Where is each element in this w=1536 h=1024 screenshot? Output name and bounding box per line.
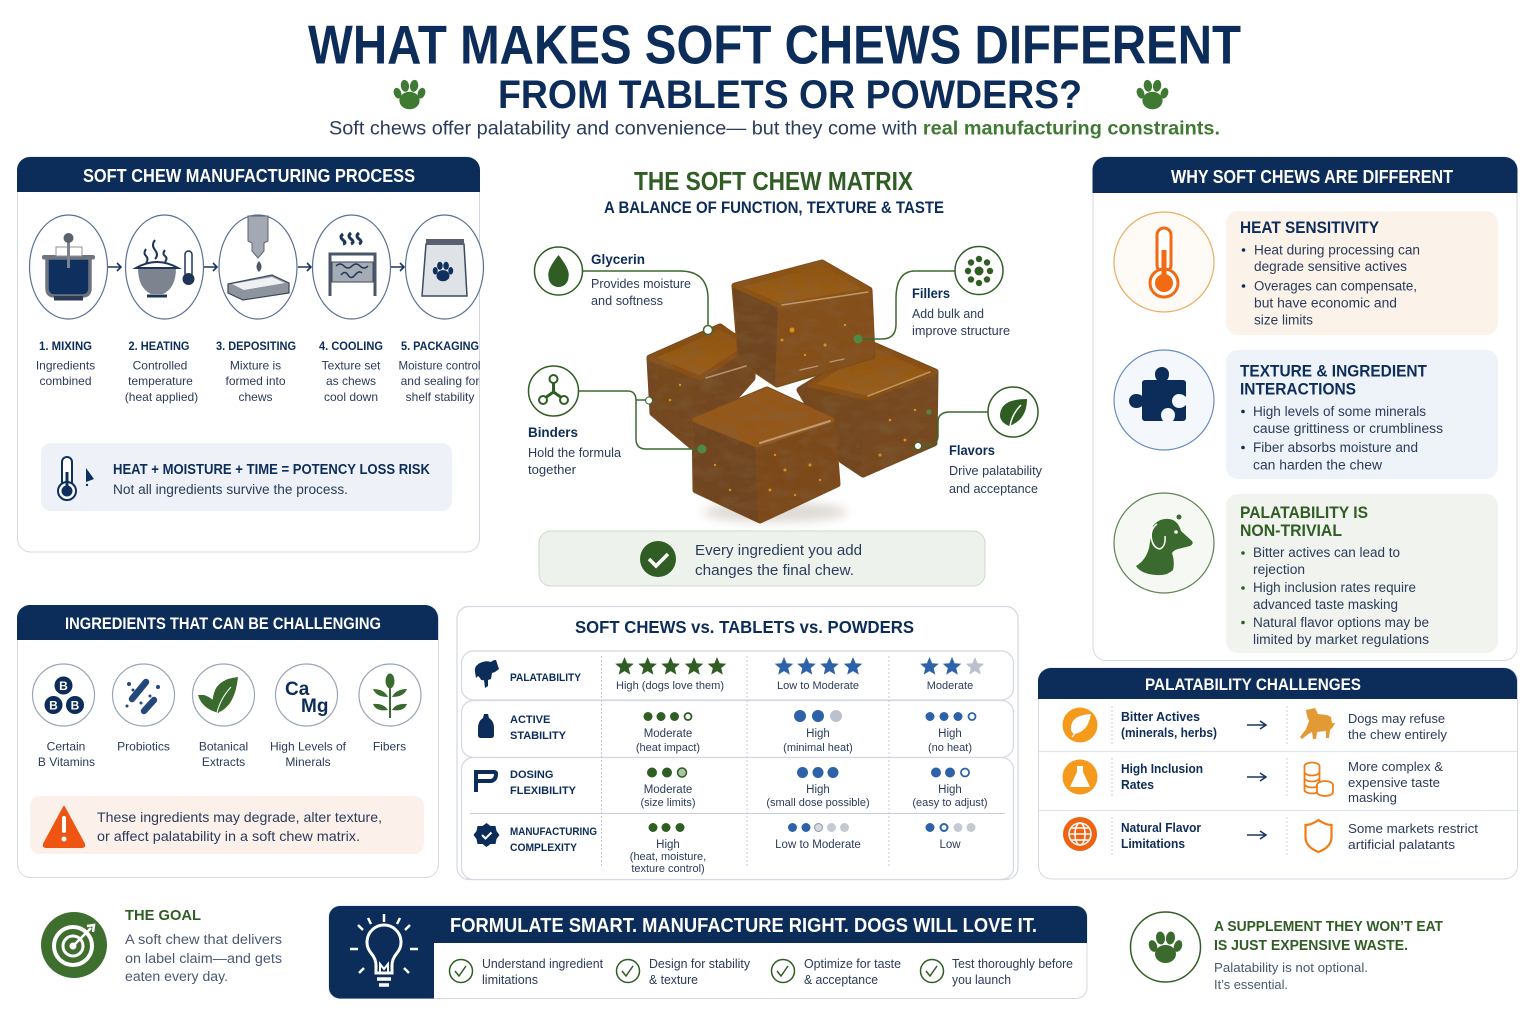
- card: texture and ingredient interactions: Fiber absorbs moisture and: [1253, 440, 1418, 455]
- card: heat sensitivity: HEAT SENSITIVITY: [1240, 219, 1379, 237]
- row: dosing flexibility: (small dose possible): [766, 797, 870, 809]
- row: active stability: (heat impact): [636, 742, 700, 754]
- step: depositing: formed into: [225, 374, 286, 388]
- panel: palatability challenges: [1038, 668, 1518, 879]
- row: high inclusion rates: Rates: [1121, 778, 1154, 792]
- card: heat sensitivity: but have economic and: [1254, 296, 1397, 310]
- heading: process: SOFT CHEW MANUFACTURING PROCESS: [83, 166, 415, 186]
- ingredient: minerals: Ca: [285, 679, 310, 700]
- ingredient: minerals: Mg: [301, 696, 328, 717]
- step: heating: [125, 215, 204, 404]
- icon: paw badge: [1130, 912, 1200, 982]
- cube back right: [800, 345, 935, 474]
- title: [308, 14, 1241, 117]
- item: test: Test thoroughly before: [952, 957, 1073, 971]
- row: palatability: High (dogs love them): [616, 680, 724, 692]
- row: dosing flexibility: Moderate: [644, 784, 692, 796]
- item: optimize: Optimize for taste: [804, 957, 901, 971]
- row: high inclusion rates: [1062, 760, 1444, 805]
- row: dosing flexibility: [476, 767, 988, 809]
- step: mixing: combined: [39, 374, 92, 388]
- callout: potency loss: [41, 443, 452, 511]
- callout: glycerin: [534, 247, 712, 334]
- callout: warning: or affect palatability in a soft chew matrix.: [97, 828, 360, 844]
- the goal: eaten every day.: [125, 969, 228, 984]
- icon: light bulb: [350, 914, 418, 985]
- callout: every ingredient: [539, 531, 985, 586]
- card: palatability is non-trivial: Bitter actives can lead to: [1253, 545, 1400, 560]
- step: packaging: Moisture control: [398, 358, 480, 372]
- ingredient: botanical extracts: [192, 664, 254, 769]
- ingredient: b vitamins: [32, 664, 95, 769]
- card: heat sensitivity: size limits: [1254, 312, 1313, 328]
- row: manufacturing complexity: High: [656, 839, 680, 851]
- cube top: [735, 263, 872, 384]
- row: natural flavor limitations: artificial palatants: [1348, 838, 1455, 852]
- step: depositing: 3. DEPOSITING: [216, 339, 296, 353]
- cube back left: [650, 327, 752, 446]
- closing message: It’s essential.: [1214, 978, 1288, 992]
- subtitle: Soft chews offer palatability and convenience— but they come with real manufacturing constraints.: [329, 118, 1220, 140]
- ingredient: fibers: Fibers: [373, 740, 406, 754]
- card: palatability is non-trivial: advanced taste masking: [1253, 597, 1398, 612]
- step: cooling: 4. COOLING: [319, 339, 383, 353]
- callout: binders: together: [528, 463, 576, 477]
- row: high inclusion rates: expensive taste: [1348, 776, 1440, 790]
- callout: binders: [528, 366, 706, 477]
- row: palatability: Low to Moderate: [777, 680, 859, 692]
- callout: warning: [30, 796, 424, 854]
- row: manufacturing complexity: (heat, moisture,: [630, 851, 706, 863]
- panel: why soft chews are different: [1092, 157, 1518, 660]
- heading: soft chew matrix: [604, 166, 944, 217]
- heading: soft chew matrix: A BALANCE OF FUNCTION, TEXTURE & TASTE: [604, 199, 944, 217]
- step: heating: Controlled: [133, 358, 187, 372]
- row: manufacturing complexity: COMPLEXITY: [510, 842, 578, 854]
- card: texture and ingredient interactions: cause grittiness or crumbliness: [1253, 421, 1443, 436]
- closing message: Palatability is not optional.: [1214, 961, 1368, 975]
- icon: paw left: [392, 79, 427, 109]
- row: natural flavor limitations: Limitations: [1121, 837, 1185, 851]
- step: packaging: 5. PACKAGING: [401, 339, 479, 353]
- arrow: [108, 263, 121, 271]
- row: bitter actives: (minerals, herbs): [1121, 726, 1217, 740]
- icon: target: [41, 912, 107, 978]
- step: cooling: [312, 215, 390, 404]
- icon: thermometer: [1114, 212, 1214, 312]
- card: heat sensitivity: degrade sensitive actives: [1254, 259, 1407, 274]
- row: palatability: [475, 657, 984, 692]
- closing message: IS JUST EXPENSIVE WASTE.: [1214, 938, 1408, 954]
- step: cooling: cool down: [324, 390, 378, 404]
- icon: paw right: [1135, 79, 1170, 109]
- image: soft chew cubes: [650, 263, 935, 522]
- row: active stability: [478, 710, 976, 754]
- row: active stability: ACTIVE: [510, 714, 550, 726]
- step: depositing: chews: [238, 390, 273, 404]
- banner: formulate smart: FORMULATE SMART. MANUFACTURE RIGHT. DOGS WILL LOVE IT.: [450, 915, 1037, 937]
- row: active stability: High: [806, 728, 830, 740]
- card: texture and ingredient interactions: INTERACTIONS: [1240, 380, 1356, 398]
- callout: fillers: Fillers: [912, 285, 950, 301]
- step: packaging: shelf stability: [406, 390, 474, 404]
- callout: fillers: [854, 246, 1010, 344]
- ingredient: probiotics: [112, 664, 174, 754]
- step: mixing: [30, 215, 108, 388]
- step: heating: 2. HEATING: [128, 339, 190, 353]
- heading: soft chew matrix: THE SOFT CHEW MATRIX: [634, 166, 914, 196]
- callout: every ingredient: changes the final chew.: [695, 562, 854, 579]
- step: packaging: [398, 215, 484, 404]
- item: understand: [450, 957, 604, 987]
- icon: dog head: [1114, 493, 1214, 593]
- arrow: [204, 263, 217, 271]
- row: manufacturing complexity: Low to Moderate: [775, 839, 861, 851]
- row: dosing flexibility: High: [806, 784, 830, 796]
- callout: flavors: Flavors: [949, 442, 995, 458]
- the goal: [41, 907, 282, 984]
- row: bitter actives: Bitter Actives: [1121, 710, 1200, 724]
- callout: every ingredient: Every ingredient you add: [695, 542, 862, 559]
- banner: formulate smart: [329, 906, 1087, 998]
- ingredient: minerals: High Levels of: [270, 740, 347, 754]
- card: heat sensitivity: Heat during processing can: [1254, 242, 1420, 258]
- arrow: [298, 263, 311, 271]
- step: cooling: as chews: [326, 374, 376, 388]
- item: test: you launch: [952, 973, 1011, 987]
- callout: fillers: Add bulk and: [912, 307, 984, 321]
- callout: potency loss: Not all ingredients survive the process.: [113, 482, 348, 497]
- callout: binders: Binders: [528, 424, 578, 440]
- row: dosing flexibility: FLEXIBILITY: [510, 785, 577, 797]
- item: design: [616, 957, 751, 987]
- icon: puzzle piece: [1114, 350, 1214, 450]
- step: heating: temperature: [128, 374, 193, 388]
- arrow: [391, 263, 404, 271]
- card: texture and ingredient interactions: can harden the chew: [1253, 458, 1382, 472]
- ingredient: b vitamins: Certain: [47, 740, 85, 754]
- ingredient: botanical extracts: Botanical: [199, 740, 248, 754]
- step: packaging: and sealing for: [401, 374, 479, 388]
- heading: palatability challenges: PALATABILITY CHALLENGES: [1145, 676, 1361, 694]
- callout: fillers: improve structure: [912, 324, 1010, 338]
- row: manufacturing complexity: [474, 823, 976, 875]
- card: texture and ingredient interactions: [1226, 350, 1498, 479]
- the goal: A soft chew that delivers: [125, 932, 282, 947]
- callout: binders: Hold the formula: [528, 446, 621, 460]
- ingredient: b vitamins: B: [49, 698, 58, 712]
- item: optimize: [772, 957, 901, 987]
- card: texture and ingredient interactions: TEXTURE & INGREDIENT: [1240, 362, 1427, 380]
- row: high inclusion rates: masking: [1348, 791, 1397, 805]
- row: dosing flexibility: DOSING: [510, 769, 553, 781]
- ingredient: probiotics: Probiotics: [117, 740, 170, 754]
- ingredient: minerals: [270, 664, 347, 769]
- callout: potency loss: HEAT + MOISTURE + TIME = POTENCY LOSS RISK: [113, 462, 430, 478]
- heading: ingredients: INGREDIENTS THAT CAN BE CHALLENGING: [65, 615, 381, 633]
- card: palatability is non-trivial: PALATABILITY IS: [1240, 504, 1368, 522]
- card: palatability is non-trivial: High inclusion rates require: [1253, 580, 1416, 595]
- panel: ingredients that can be challenging: [17, 605, 438, 878]
- ingredient: b vitamins: B: [71, 698, 80, 712]
- callout: flavors: and acceptance: [949, 482, 1038, 496]
- closing message: A SUPPLEMENT THEY WON’T EAT: [1214, 919, 1443, 935]
- cube highlights: [706, 292, 930, 443]
- row: active stability: STABILITY: [510, 730, 567, 742]
- heading: why: WHY SOFT CHEWS ARE DIFFERENT: [1171, 167, 1453, 187]
- row: bitter actives: the chew entirely: [1348, 728, 1448, 742]
- row: bitter actives: [1062, 708, 1448, 742]
- row: active stability: High: [938, 728, 962, 740]
- callout: glycerin: Glycerin: [591, 251, 645, 267]
- callout: warning: These ingredients may degrade, alter texture,: [97, 809, 382, 825]
- row: palatability: Moderate: [927, 680, 973, 692]
- cube speckles: [669, 324, 916, 496]
- card: texture and ingredient interactions: High levels of some minerals: [1253, 404, 1426, 419]
- ingredient: fibers: [359, 664, 421, 754]
- row: natural flavor limitations: Natural Flavor: [1121, 821, 1201, 835]
- row: high inclusion rates: High Inclusion: [1121, 762, 1203, 776]
- row: natural flavor limitations: [1063, 817, 1479, 852]
- item: design: & texture: [649, 973, 698, 987]
- ingredient: b vitamins: B Vitamins: [38, 755, 95, 769]
- row: natural flavor limitations: Some markets restrict: [1348, 822, 1479, 836]
- the goal: THE GOAL: [125, 907, 201, 924]
- card: heat sensitivity: Overages can compensate,: [1254, 278, 1417, 294]
- step: mixing: Ingredients: [36, 358, 95, 372]
- callout: flavors: [914, 387, 1043, 496]
- card: heat sensitivity: [1226, 211, 1498, 335]
- row: manufacturing complexity: texture control): [631, 863, 705, 875]
- heading: comparison: SOFT CHEWS vs. TABLETS vs. POWDERS: [575, 617, 914, 637]
- ingredient: b vitamins: B: [59, 679, 68, 693]
- item: design: Design for stability: [649, 957, 751, 971]
- row: dosing flexibility: (easy to adjust): [912, 797, 988, 809]
- row: active stability: Moderate: [644, 728, 692, 740]
- card: palatability is non-trivial: Natural flavor options may be: [1253, 615, 1429, 630]
- row: dosing flexibility: High: [938, 784, 962, 796]
- step: depositing: [216, 215, 297, 404]
- ingredient: minerals: Minerals: [285, 755, 331, 769]
- panel: soft chew manufacturing process: [17, 157, 484, 552]
- title: FROM TABLETS OR POWDERS?: [498, 73, 1082, 117]
- ingredient: botanical extracts: Extracts: [202, 755, 245, 769]
- row: bitter actives: Dogs may refuse: [1348, 712, 1445, 726]
- the goal: on label claim—and gets: [125, 951, 282, 966]
- item: test: [920, 957, 1073, 987]
- card: palatability is non-trivial: [1226, 494, 1498, 653]
- card: palatability is non-trivial: limited by market regulations: [1253, 632, 1429, 647]
- item: understand: limitations: [482, 973, 538, 987]
- title: WHAT MAKES SOFT CHEWS DIFFERENT: [308, 14, 1241, 76]
- row: manufacturing complexity: MANUFACTURING: [510, 826, 597, 838]
- row: active stability: (minimal heat): [783, 742, 853, 754]
- callout: flavors: Drive palatability: [949, 464, 1043, 478]
- item: optimize: & acceptance: [804, 973, 878, 987]
- row: dosing flexibility: (size limits): [640, 797, 696, 809]
- closing message: [1130, 912, 1443, 992]
- row: active stability: (no heat): [928, 742, 972, 754]
- step: cooling: Texture set: [322, 358, 381, 372]
- step: mixing: 1. MIXING: [39, 339, 92, 353]
- step: heating: (heat applied): [125, 390, 198, 404]
- row: high inclusion rates: More complex &: [1348, 760, 1444, 774]
- row: palatability: PALATABILITY: [510, 672, 582, 684]
- panel: comparison table: [457, 606, 1018, 880]
- cube front: [695, 390, 837, 520]
- callout: glycerin: and softness: [591, 294, 663, 308]
- step: depositing: Mixture is: [230, 358, 281, 372]
- callout: glycerin: Provides moisture: [591, 277, 691, 291]
- card: palatability is non-trivial: rejection: [1253, 562, 1305, 577]
- item: understand: Understand ingredient: [482, 957, 604, 971]
- card: palatability is non-trivial: NON-TRIVIAL: [1240, 522, 1342, 540]
- row: manufacturing complexity: Low: [939, 839, 961, 851]
